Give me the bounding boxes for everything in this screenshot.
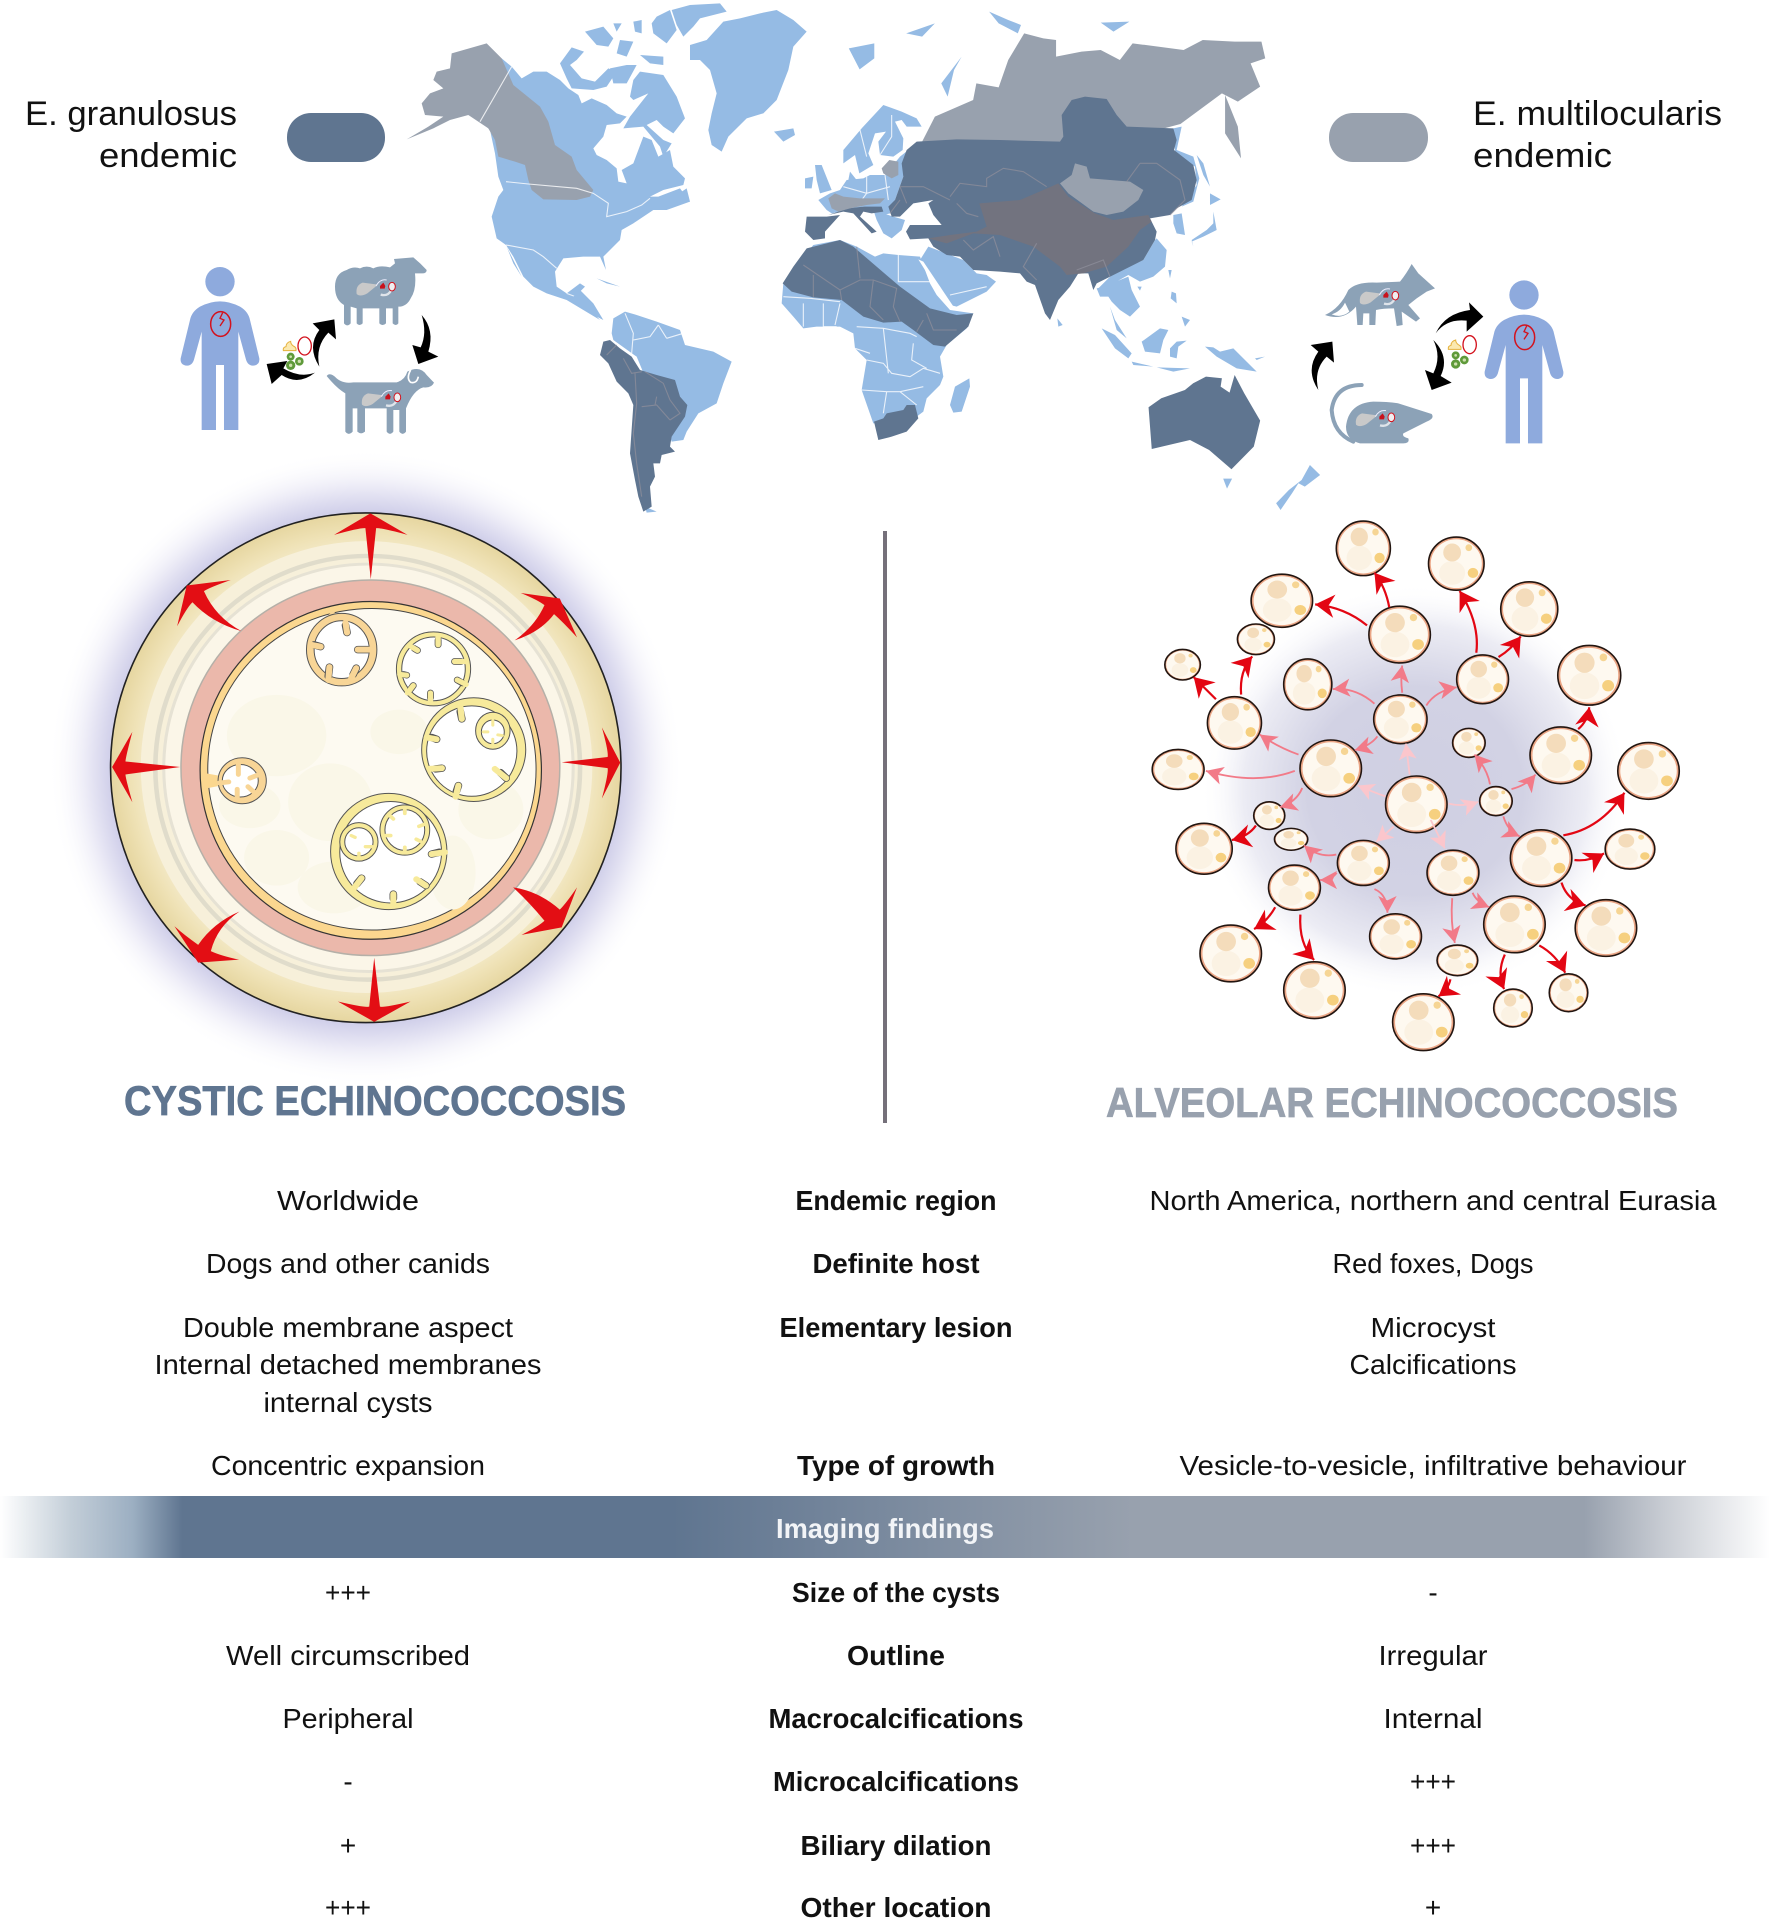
legend: E. granulosus label: E. granulosus [25, 95, 237, 133]
comparison table: imaging findings: Biliary dilation [800, 1830, 992, 1861]
comparison table: general findings: Vesicle-to-vesicle, infiltrative behaviour [1180, 1450, 1686, 1481]
map: Mongolia multilocularis [1060, 163, 1143, 215]
expansion arrows [112, 513, 620, 1022]
comparison table: general findings: Calcifications [1350, 1349, 1516, 1380]
comparison table: imaging findings: Outline [847, 1640, 945, 1671]
arrow: up-left [177, 580, 241, 631]
legend: E. multilocularis label: endemic [1473, 137, 1612, 175]
map: Arctic Eurasia islands and Russia [849, 12, 1265, 158]
comparison table: general findings: Red foxes, Dogs [1332, 1248, 1534, 1279]
comparison table: general findings: internal cysts [264, 1387, 432, 1418]
halo [1200, 584, 1630, 998]
middle pink growth arrows [1206, 665, 1536, 943]
laminated rings [141, 541, 592, 993]
comparison table: general findings: Elementary lesion [780, 1312, 1012, 1343]
arrow: right [562, 727, 620, 799]
pericyst pink ring [181, 580, 560, 956]
icon: human [181, 267, 259, 430]
arrow: human to sheep [313, 319, 336, 367]
arrow: up-right [515, 593, 577, 640]
comparison table: imaging findings: Well circumscribed [226, 1640, 470, 1671]
comparison table: general findings: Worldwide [277, 1185, 419, 1216]
map: Australia and New Zealand [1149, 375, 1320, 510]
legend: E. granulosus label [25, 95, 237, 175]
comparison table: imaging findings: Microcalcifications [773, 1766, 1019, 1797]
comparison table: imaging findings: Irregular [1378, 1640, 1488, 1671]
map: Alaska and western Canada (E. multilocularis) [407, 43, 593, 200]
legend: E. multilocularis label: E. multilocularis [1473, 95, 1722, 133]
comparison table: imaging findings: Peripheral [282, 1703, 414, 1734]
imaging findings band [0, 1496, 1770, 1558]
map: South America endemic [600, 340, 687, 512]
legend: E. granulosus label: endemic [99, 137, 237, 175]
life cycle: E. granulosus [181, 257, 438, 434]
comparison table: general findings: Definite host [812, 1248, 980, 1279]
comparison table: imaging findings: + [340, 1830, 356, 1861]
legend: E. multilocularis label [1473, 95, 1722, 175]
legend: E. multilocularis swatch [1329, 113, 1428, 162]
pale central growth arrows [1358, 744, 1478, 848]
outer red growth arrows [1194, 573, 1624, 996]
cystic echinococcosis diagram [48, 449, 683, 1086]
icon: human [1485, 280, 1563, 443]
map: Canadian Arctic islands [560, 3, 727, 202]
comparison table: imaging findings: +++ [1410, 1830, 1456, 1861]
heading: alveolar echinococcosis: ALVEOLAR ECHINOCOCCOSIS [1106, 1079, 1678, 1126]
legend: E. granulosus swatch [287, 113, 385, 162]
comparison table: general findings: Endemic region [796, 1185, 996, 1216]
arrow: fox to human [1436, 302, 1483, 333]
comparison table: general findings: Type of growth [797, 1450, 995, 1481]
map: China overlap [928, 183, 1152, 275]
outer cyst wall [111, 513, 621, 1023]
halo [48, 449, 683, 1086]
map: central Asia endemic [888, 97, 1197, 320]
comparison table: imaging findings: +++ [325, 1577, 371, 1608]
map: South Africa endemic [874, 405, 918, 440]
comparison table: imaging findings: Macrocalcifications [768, 1703, 1024, 1734]
daughter cyst top left [306, 610, 377, 686]
arrow: sheep to dog [412, 315, 438, 364]
comparison table: imaging findings: Size of the cysts [792, 1577, 1000, 1608]
map: Mediterranean endemic [805, 207, 883, 240]
pale hydatid sand [219, 695, 523, 913]
arrow: left [112, 732, 180, 802]
icon: sheep [335, 257, 427, 325]
icon: eggs and faeces [283, 337, 311, 370]
comparison table: imaging findings: - [343, 1766, 353, 1797]
comparison table: general findings: Double membrane aspect [183, 1312, 513, 1343]
icon: dog [327, 369, 434, 434]
comparison table: general findings: Internal detached membranes [154, 1349, 542, 1380]
map: East and Southeast Asia light [1057, 127, 1265, 372]
icon: rodent [1332, 385, 1433, 443]
life cycle: E. multilocularis [1311, 264, 1563, 443]
comparison table: imaging findings: - [1428, 1577, 1438, 1608]
comparison table: imaging findings: +++ [1410, 1766, 1456, 1797]
comparison table: imaging findings [226, 1577, 1488, 1920]
comparison table: general findings [154, 1185, 1717, 1481]
world map [407, 3, 1320, 513]
imaging findings band: Imaging findings [776, 1513, 994, 1544]
icon: eggs and faeces [1448, 336, 1476, 369]
map: North America and Greenland [407, 3, 807, 320]
daughter cyst bottom with two internal cysts [331, 793, 447, 910]
arrow: dog to human [267, 361, 315, 384]
heading: cystic echinococcosis: CYSTIC ECHINOCOCCOSIS [124, 1077, 626, 1124]
arrow: down [338, 958, 411, 1022]
daughter cyst top right [396, 632, 471, 706]
gold membrane [200, 601, 541, 939]
arrow: down-left [174, 911, 240, 963]
map: Europe [805, 97, 1265, 372]
arrow: rodent to fox [1311, 342, 1334, 390]
vesicles [1152, 521, 1679, 1051]
comparison table: general findings: Microcyst [1370, 1312, 1496, 1343]
exogenous daughter cyst left [202, 758, 266, 804]
map: South America [570, 290, 732, 513]
divider [883, 531, 887, 1123]
map: Africa and Arabia [782, 240, 996, 440]
comparison table: general findings: North America, northern and central Eurasia [1150, 1185, 1717, 1216]
comparison table: imaging findings: Internal [1384, 1703, 1482, 1734]
daughter cyst right with internal cyst [422, 698, 526, 801]
alveolar echinococcosis diagram [1152, 521, 1679, 1051]
map: Greenland and Iceland [690, 10, 807, 152]
inner cavity [208, 609, 536, 930]
arrow: up [334, 513, 407, 579]
map: Europe multilocularis patches [828, 160, 898, 212]
arrow: human to rodent [1425, 340, 1452, 390]
icon: fox [1325, 264, 1435, 326]
comparison table: general findings: Dogs and other canids [206, 1248, 490, 1279]
comparison table: general findings: Concentric expansion [211, 1450, 485, 1481]
map: Sahel band endemic [783, 240, 973, 347]
arrow: down-right [513, 887, 577, 935]
